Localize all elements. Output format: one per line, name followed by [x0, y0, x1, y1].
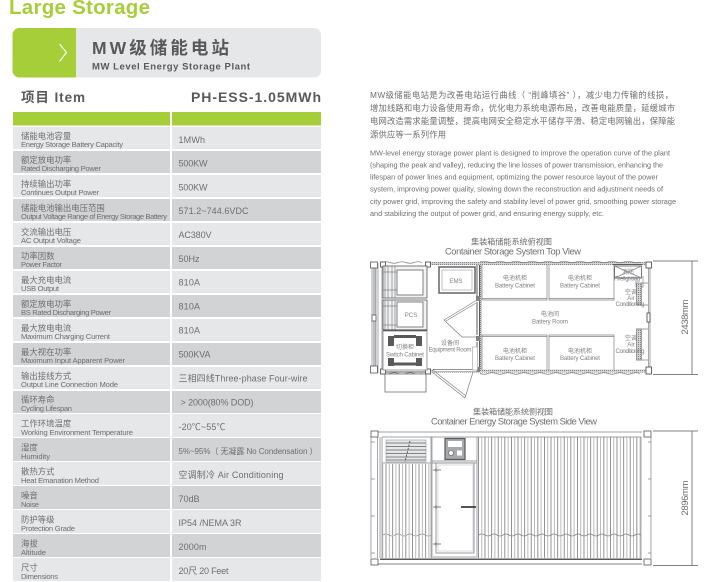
right corrugated wall [478, 437, 641, 558]
heading: top view: Container Storage System Top View [445, 246, 581, 256]
dimension: height 2896mm: 2896mm [680, 480, 691, 516]
battery cabinets: Battery Cabinet [495, 355, 535, 362]
row: humidity: 湿度 [21, 442, 38, 452]
row: altitude: Altitude [21, 548, 46, 557]
heading: top view [445, 236, 581, 256]
row: BS rated discharging power: 额定放电功率 [21, 299, 71, 309]
battery cabinets: 电池机柜 [568, 347, 592, 355]
row: power factor: 50Hz [178, 254, 200, 264]
air conditioner lower: Air [627, 342, 635, 348]
row: protection grade: 防护等级 [21, 514, 55, 524]
battery cabinets: 电池机柜 [503, 347, 527, 355]
text block: Chinese description: MW级储能电站是为改善电站运行曲线（ “削峰填谷” ），减少电力传输的线损， [370, 90, 673, 100]
row: power factor [13, 247, 321, 269]
battery cabinets: Battery Cabinet [560, 355, 600, 362]
PCS cabinets [383, 266, 427, 331]
air conditioner lower: 空调 [625, 334, 637, 342]
inner partition and doors [385, 265, 482, 398]
firefighting unit: Firefighting [614, 276, 640, 282]
row: rated discharging power: Rated Discharging Power [21, 164, 101, 173]
PCS cabinets: PCS [405, 312, 417, 319]
row: maximum charging current: 最大放电电流 [21, 323, 72, 333]
top and bottom container walls [382, 261, 646, 374]
central door and control box [432, 437, 477, 558]
row: continuous output power [13, 175, 321, 197]
battery cabinets: Battery Cabinet [495, 282, 535, 290]
text block: Chinese description: 增加线路和电力设备使用寿命，优化电力系统电源布局，改善电能质量，延缓城市 [370, 103, 675, 113]
row: working temperature: Working Environment Temperature [21, 428, 133, 437]
air conditioner lower [616, 329, 648, 360]
row: output line connection mode: Output Line Connection Mode [21, 380, 118, 389]
row: heat emanation: 散热方式 [21, 466, 55, 476]
heading: section subtitle: MW Level Energy Storage Plant [92, 62, 251, 72]
text block: English description: and stabilizing the output of power grid, and ensuring energy supply, etc. [370, 209, 604, 218]
row: AC output voltage: AC380V [178, 230, 212, 240]
row: USB output: 最大充电电流 [21, 275, 72, 285]
air conditioner lower: Conditioning [616, 348, 644, 355]
row: output line connection mode: 三相四线Three-phase Four-wire [178, 372, 308, 384]
heading: top view: 集装箱储能系统俯视图 [471, 236, 552, 246]
text block: English description: lifespan of power lines and equipment, optimizing the power resource layout of the power [370, 173, 659, 182]
air conditioner upper: 空调 [625, 288, 637, 296]
row: BS rated discharging power [13, 295, 321, 317]
switch cabinet: Switch Cabinet [386, 352, 424, 358]
row: protection grade: IP54 /NEMA 3R [178, 518, 242, 528]
row: rated discharging power: 额定放电功率 [21, 155, 71, 165]
text block: Chinese description: 源供应等一系列作用 [370, 130, 446, 140]
battery cabinets: 电池机柜 [568, 274, 592, 282]
equipment room label [428, 339, 472, 354]
battery room label: Battery Room [532, 318, 568, 326]
right end wall [646, 262, 652, 374]
switch cabinet: 切换柜 [396, 343, 414, 351]
air conditioner upper [616, 283, 648, 308]
row: USB output: 810A [178, 278, 200, 288]
row: maximum charging current: Maximum Charging Current [21, 332, 111, 341]
row: battery capacity: 1MWh [178, 135, 205, 145]
row: USB output [13, 271, 321, 293]
row: noise [13, 486, 321, 509]
text block: English description: (shaping the peak and valley), reducing the line losses of power transmission, enhancing the [370, 160, 663, 170]
row: working temperature: -20℃~55℃ [178, 422, 226, 432]
row: continuous output power: 500KW [178, 182, 208, 192]
text block: English description [370, 148, 676, 218]
row: dimensions [13, 558, 321, 581]
diagram: top view floor plan [370, 261, 698, 398]
row: power factor: Power Factor [21, 260, 62, 269]
row: heat emanation: 空调制冷 Air Conditioning [178, 469, 284, 480]
row: dimensions: 尺寸 [21, 562, 38, 572]
row: USB output: USB Output [21, 284, 60, 293]
row: altitude: 2000m [178, 542, 206, 552]
row: cycling lifespan: > 2000(80% DOD) [180, 398, 254, 408]
container frame [371, 431, 651, 565]
row: dimensions: Dimensions [21, 572, 58, 581]
row: humidity [13, 438, 321, 461]
row: maximum charging current: 810A [178, 326, 200, 336]
row: maximum charging current [13, 319, 321, 341]
heading: side view [431, 406, 597, 426]
EMS box: EMS [449, 278, 463, 285]
equipment room label: Equipment Room [428, 346, 472, 354]
dimension: width 2438mm: 2438mm [680, 299, 691, 334]
dimension: height 2896mm [653, 431, 698, 566]
row: BS rated discharging power: BS Rated Discharging Power [21, 308, 111, 317]
row: noise: 噪音 [21, 490, 38, 500]
specification table [13, 112, 321, 581]
row: rated discharging power [13, 151, 321, 173]
text block: English description: city power grid, improving the safety and stability level of power grid, smoothing power storage [370, 197, 676, 206]
EMS box [439, 267, 475, 293]
row: noise: Noise [21, 500, 39, 509]
row: protection grade [13, 510, 321, 533]
row: heat emanation [13, 462, 321, 485]
battery room label: 电池间 [541, 310, 559, 318]
row: working temperature: 工作环境温度 [21, 418, 72, 428]
battery room label [532, 310, 568, 326]
text block: Chinese description: 电网改造需求能量调整，提高电网安全稳定水平储存平滑、稳定电网输出，保障能 [370, 116, 675, 126]
table heading: model: PH-ESS-1.05MWh [191, 89, 321, 105]
heading: side view: 集装箱储能系统侧视图 [473, 406, 553, 416]
row: heat emanation: Heat Emanation Method [21, 476, 99, 485]
row: maximum apparent power: 最大视在功率 [21, 347, 71, 357]
row: maximum apparent power: 500KVA [178, 350, 210, 360]
row: maximum apparent power: Maximum Input Apparent Power [21, 356, 125, 365]
firefighting unit: 消防 [622, 268, 634, 276]
row: battery capacity: 储能电池容量 [21, 131, 71, 141]
air conditioner upper: Conditioning [616, 301, 644, 308]
row: working temperature [13, 414, 321, 437]
text block: English description: MW-level energy storage power plant is designed to improve the operation curve of the plant [370, 148, 670, 158]
text block: Chinese description [370, 90, 675, 140]
row: battery capacity [13, 127, 321, 149]
battery cabinets: Battery Cabinet [560, 282, 600, 290]
row: cycling lifespan: 循环寿命 [21, 394, 55, 404]
row: battery capacity: Energy Storage Battery Capacity [21, 140, 123, 149]
text block: English description: system, improving power quality, slowing down the reconstruction and adjustment needs of [370, 185, 664, 194]
switch cabinet [383, 331, 427, 370]
row: output voltage range: 储能电池输出电压范围 [21, 203, 105, 213]
icon: chevron arrow [60, 44, 66, 62]
row: AC output voltage: 交流输出电压 [21, 227, 71, 237]
row: rated discharging power: 500KW [178, 158, 208, 168]
diagram: side view elevation [371, 431, 698, 566]
battery cabinets: 电池机柜 [503, 274, 527, 282]
row: cycling lifespan: Cycling Lifespan [21, 404, 72, 413]
row: altitude [13, 534, 321, 557]
battery cabinets [482, 265, 614, 370]
left corrugated panel with louver [382, 437, 431, 558]
row: altitude: 海拔 [21, 538, 38, 548]
row: noise: 70dB [178, 494, 200, 504]
row: AC output voltage: AC Output Voltage [21, 236, 81, 245]
row: BS rated discharging power: 810A [178, 302, 200, 312]
row: humidity: Humidity [21, 452, 50, 461]
row: output line connection mode: 输出接线方式 [21, 371, 72, 381]
heading: side view: Container Energy Storage System Side View [431, 416, 597, 426]
left end wall [370, 262, 430, 374]
row: output voltage range: Output Voltage Range of Energy Storage Battery [21, 212, 167, 221]
row: cycling lifespan [13, 391, 321, 413]
row: output voltage range: 571.2~744.6VDC [178, 206, 249, 216]
row: dimensions: 20尺 20 Feet [178, 566, 229, 576]
air conditioner upper: Air [627, 295, 635, 302]
dimension: width 2438mm [653, 261, 698, 374]
row: power factor: 功率因数 [21, 251, 55, 261]
row: continuous output power: 持续输出功率 [21, 179, 71, 189]
row: maximum apparent power [13, 343, 321, 365]
row: continuous output power: Continues Output Power [21, 188, 99, 197]
equipment room label: 设备间 [441, 339, 459, 347]
heading: section title: MW级储能电站 [92, 38, 229, 58]
panel: section header [12, 28, 321, 78]
row: output line connection mode [13, 367, 321, 389]
row: humidity: 5%~95%（ 无凝露 No Condensation ） [178, 446, 318, 456]
firefighting unit [614, 266, 643, 287]
row: protection grade: Protection Grade [21, 524, 75, 533]
row: output voltage range [13, 199, 321, 221]
row: AC output voltage [13, 223, 321, 245]
table heading: item: 项目 Item [21, 90, 85, 105]
